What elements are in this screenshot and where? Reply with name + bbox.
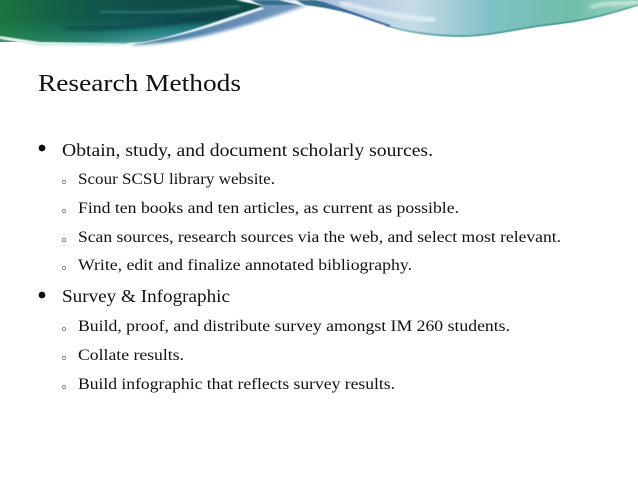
sub-item: scan: Scan sources, research sources via the web, and select most relevant. bbox=[78, 229, 561, 246]
sub-item: books: Find ten books and ten articles, as current as possible. bbox=[78, 200, 459, 217]
sub-bullet marker bbox=[62, 180, 66, 184]
sub-bullet marker bbox=[62, 238, 66, 242]
sub-item: distribute survey: Build, proof, and distribute survey amongst IM 260 students. bbox=[78, 318, 510, 335]
sub-item: bibliography: Write, edit and finalize annotated bibliography. bbox=[78, 257, 412, 274]
bullet: survey bbox=[39, 292, 45, 298]
sub-bullet marker bbox=[62, 356, 66, 360]
banner: abstract teal and green wave bbox=[0, 0, 638, 46]
sub-bullet marker bbox=[62, 327, 66, 331]
sub-bullet marker bbox=[62, 385, 66, 389]
sub-bullet marker bbox=[62, 209, 66, 213]
heading: survey: Survey & Infographic bbox=[62, 286, 230, 306]
bullet: obtain sources bbox=[39, 145, 45, 151]
sub-item: collate: Collate results. bbox=[78, 347, 184, 364]
sub-bullet marker bbox=[62, 266, 66, 270]
title: Research Methods bbox=[38, 71, 241, 97]
heading: obtain sources: Obtain, study, and document scholarly sources. bbox=[62, 140, 433, 160]
sub-item: library: Scour SCSU library website. bbox=[78, 171, 275, 188]
sub-item: infographic: Build infographic that reflects survey results. bbox=[78, 376, 395, 393]
bullet list: research methods bbox=[39, 140, 561, 393]
